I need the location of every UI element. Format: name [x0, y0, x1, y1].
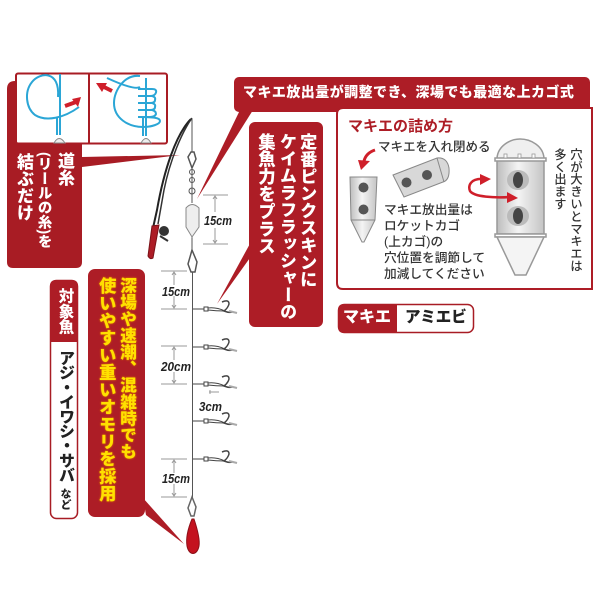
text: 魚名: アジ・イワシ・サバ — [56, 350, 73, 481]
icon: knot step 1 — [27, 74, 81, 143]
dimension marks — [161, 195, 228, 497]
panel: bait filling box — [337, 108, 592, 289]
arrow: rotate — [469, 174, 518, 203]
text: など: など — [59, 488, 71, 510]
panel: target fish — [50, 280, 78, 518]
heading: banner: マキエ放出量が調整でき、深場でも最適な上カゴ式 — [243, 84, 574, 100]
text: 深場や速潮: 深場や速潮、混雑時でも — [118, 277, 137, 460]
text: 放出量の説明 — [384, 203, 485, 281]
text: 放出量の説明: ロケットカゴ — [384, 219, 460, 233]
text: マキエ: マキエ — [343, 309, 391, 326]
text: 集魚力をプラス: 集魚力をプラス — [256, 133, 276, 255]
text: 使いやすい: 使いやすい重いオモリを採用 — [96, 277, 116, 502]
text: 放出量の説明: マキエ放出量は — [384, 203, 473, 217]
icon: large rocket basket — [495, 139, 546, 275]
hooks — [193, 301, 237, 463]
main line — [192, 272, 194, 498]
icon: open rocket basket lid — [393, 158, 449, 197]
text: 定番ピンクスキンに: 定番ピンクスキンに — [297, 133, 317, 288]
label: 15cm top: 15cm — [204, 213, 232, 228]
text: アミエビ: アミエビ — [405, 309, 467, 326]
icon: swivel and snap rig — [186, 119, 199, 272]
text: 放出量の説明: 加減してください — [384, 267, 485, 281]
label: 3cm: 3cm — [199, 399, 222, 414]
text: 放出量の説明: (上カゴ)の — [384, 235, 443, 249]
arrow: insert — [358, 150, 375, 170]
label: 15cm lower: 15cm — [162, 471, 190, 486]
panel: knot steps — [16, 73, 167, 144]
icon: snap and red sinker — [187, 497, 199, 554]
icon: open rocket basket bottom — [350, 177, 377, 242]
text: マキエを入れ閉める: マキエを入れ閉める — [378, 140, 491, 154]
text: 対象魚: 対象魚 — [56, 288, 74, 334]
text: 多く出ます: 多く出ます — [552, 148, 566, 210]
panel: top banner with pointer — [197, 77, 590, 199]
label: 15cm upper: 15cm — [162, 284, 190, 299]
panel: second callout with pointer — [217, 122, 323, 327]
heading: マキエの詰め方: マキエの詰め方 — [348, 118, 453, 135]
panel: left callout with tail — [7, 81, 180, 268]
tag: bait — [338, 304, 474, 333]
icon: rocket basket on line — [186, 204, 199, 237]
text: 放出量の説明: 穴位置を調節して — [384, 251, 485, 265]
text: 結ぶだけ: 結ぶだけ — [14, 153, 33, 221]
text: 穴が大きいと: 穴が大きいとマキエは — [568, 148, 582, 272]
text: ケイムラフラッシャーの: ケイムラフラッシャーの — [277, 133, 296, 320]
label: 20cm: 20cm — [160, 359, 191, 374]
panel: weight callout with pointer — [88, 269, 184, 544]
icon: fishing rod — [148, 118, 192, 259]
text: リールの糸を: (リールの糸)を — [36, 152, 52, 249]
text: 道糸: 道糸 — [55, 152, 74, 186]
icon: knot step 2 — [96, 76, 160, 143]
